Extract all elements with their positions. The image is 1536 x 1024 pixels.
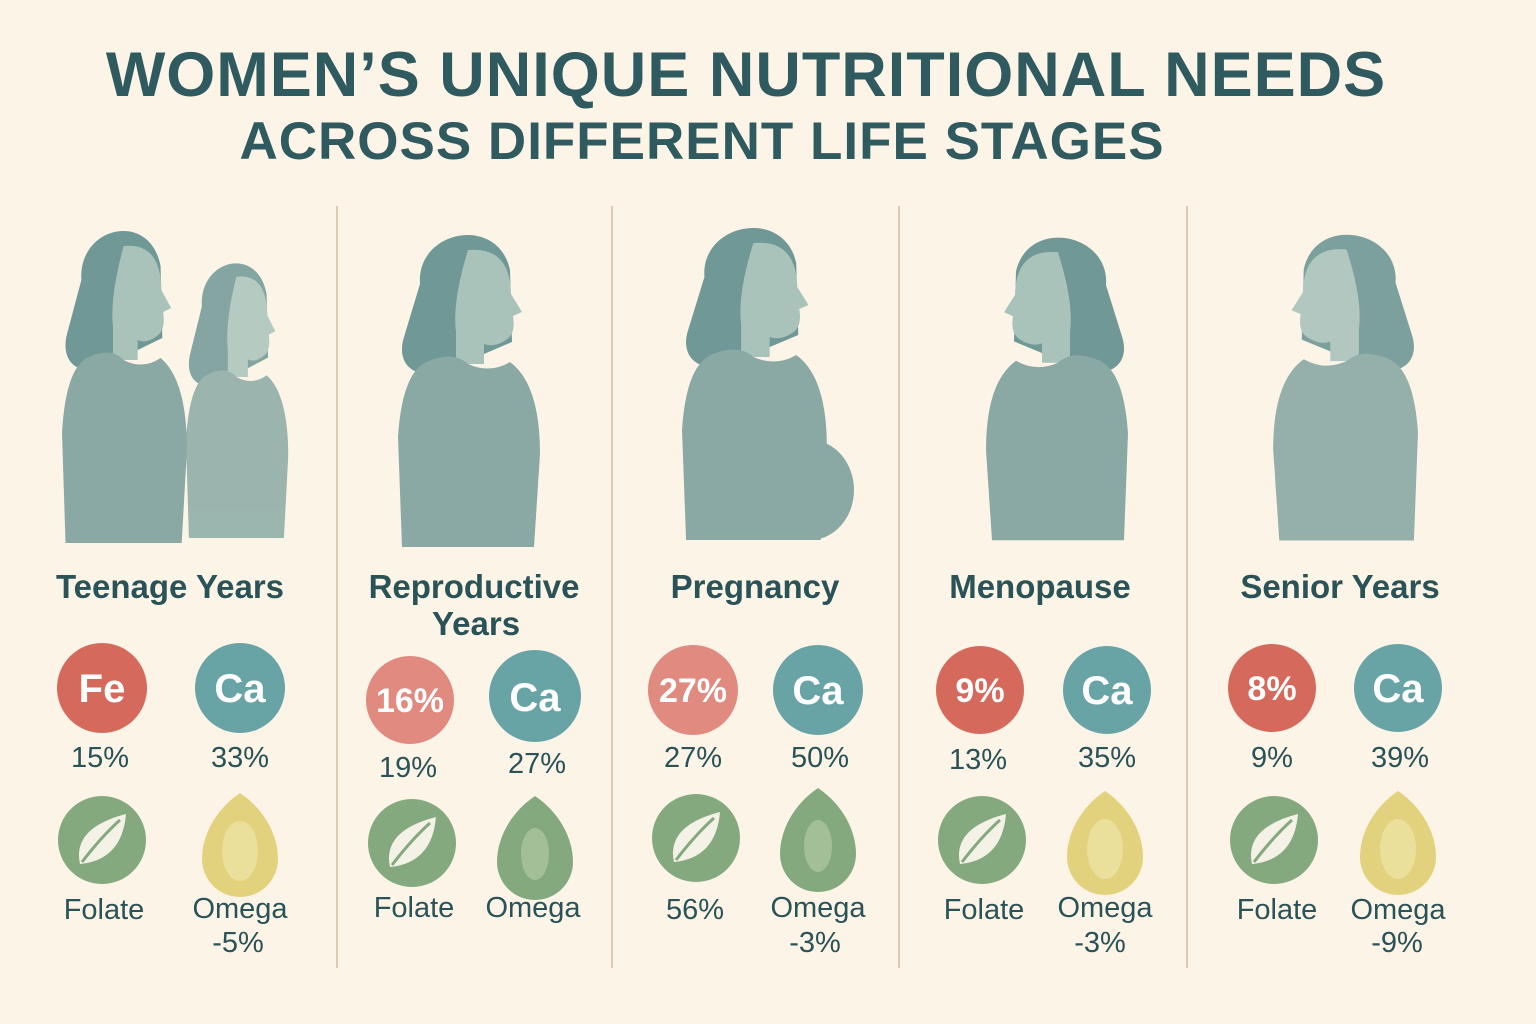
nutrient stats: -3% (1074, 927, 1126, 959)
nutrient stats: Omega (1350, 894, 1446, 926)
heading: Pregnancy: Pregnancy (671, 568, 840, 605)
nutrient stats: Fe (79, 667, 125, 711)
illustration: middle-aged woman (986, 238, 1128, 540)
heading: Senior Years: Senior Years (1240, 568, 1440, 605)
heading: Teenage Years: Teenage Years (56, 568, 284, 605)
panel: menopause (936, 238, 1153, 959)
nutrient stats: 19% (379, 752, 437, 784)
nutrient stats: Ca (214, 667, 266, 711)
panel: reproductive years (366, 235, 581, 924)
heading: Menopause: Menopause (949, 568, 1131, 605)
title: ACROSS DIFFERENT LIFE STAGES (239, 112, 1165, 171)
heading: Reproductive Years: Reproductive (369, 568, 579, 605)
nutrient stats: -5% (212, 927, 264, 959)
nutrient stats: Folate (374, 892, 454, 924)
nutrient stats (936, 646, 1153, 959)
nutrient stats: Folate (64, 894, 144, 926)
nutrient stats: 27% (659, 672, 727, 710)
illustration: pregnant woman (682, 228, 854, 540)
illustration: senior woman (1273, 235, 1418, 541)
panel: senior years (1228, 235, 1446, 959)
nutrient stats: 9% (955, 672, 1005, 710)
illustration: woman (398, 235, 540, 547)
panel: pregnancy (648, 228, 866, 959)
nutrient stats: Omega (485, 892, 581, 924)
nutrient stats: Folate (1237, 894, 1317, 926)
nutrient stats (648, 645, 866, 959)
nutrient stats: 27% (508, 748, 566, 780)
title (106, 40, 1386, 171)
nutrient stats: 39% (1371, 742, 1429, 774)
nutrient stats: 35% (1078, 742, 1136, 774)
nutrient stats: 27% (664, 742, 722, 774)
nutrient stats: 13% (949, 744, 1007, 776)
panel: reproductive years: Years (432, 605, 520, 642)
nutrient stats: 56% (666, 894, 724, 926)
nutrient stats: Ca (1081, 669, 1133, 713)
nutrient stats (57, 643, 288, 959)
nutrient stats: Ca (792, 669, 844, 713)
nutrient stats: Omega (192, 893, 288, 925)
nutrient stats: 50% (791, 742, 849, 774)
nutrient stats: Omega (1057, 892, 1153, 924)
nutrient stats: 9% (1251, 742, 1293, 774)
nutrient stats: Omega (770, 892, 866, 924)
nutrient stats: 8% (1247, 670, 1297, 708)
nutrient stats: 15% (71, 742, 129, 774)
nutrient stats: Ca (509, 676, 561, 720)
nutrient stats: -3% (789, 927, 841, 959)
title: WOMEN’S UNIQUE NUTRITIONAL NEEDS (106, 40, 1386, 110)
illustration: two teenage girls (62, 231, 288, 543)
nutrient stats: Folate (944, 894, 1024, 926)
nutrient stats (1228, 644, 1446, 959)
nutrient stats: Ca (1372, 667, 1424, 711)
nutrient stats: -9% (1371, 927, 1423, 959)
nutrient stats (366, 650, 581, 924)
nutrient stats: 16% (376, 682, 444, 720)
panel: teenage years (56, 231, 288, 959)
nutrient stats: 33% (211, 742, 269, 774)
